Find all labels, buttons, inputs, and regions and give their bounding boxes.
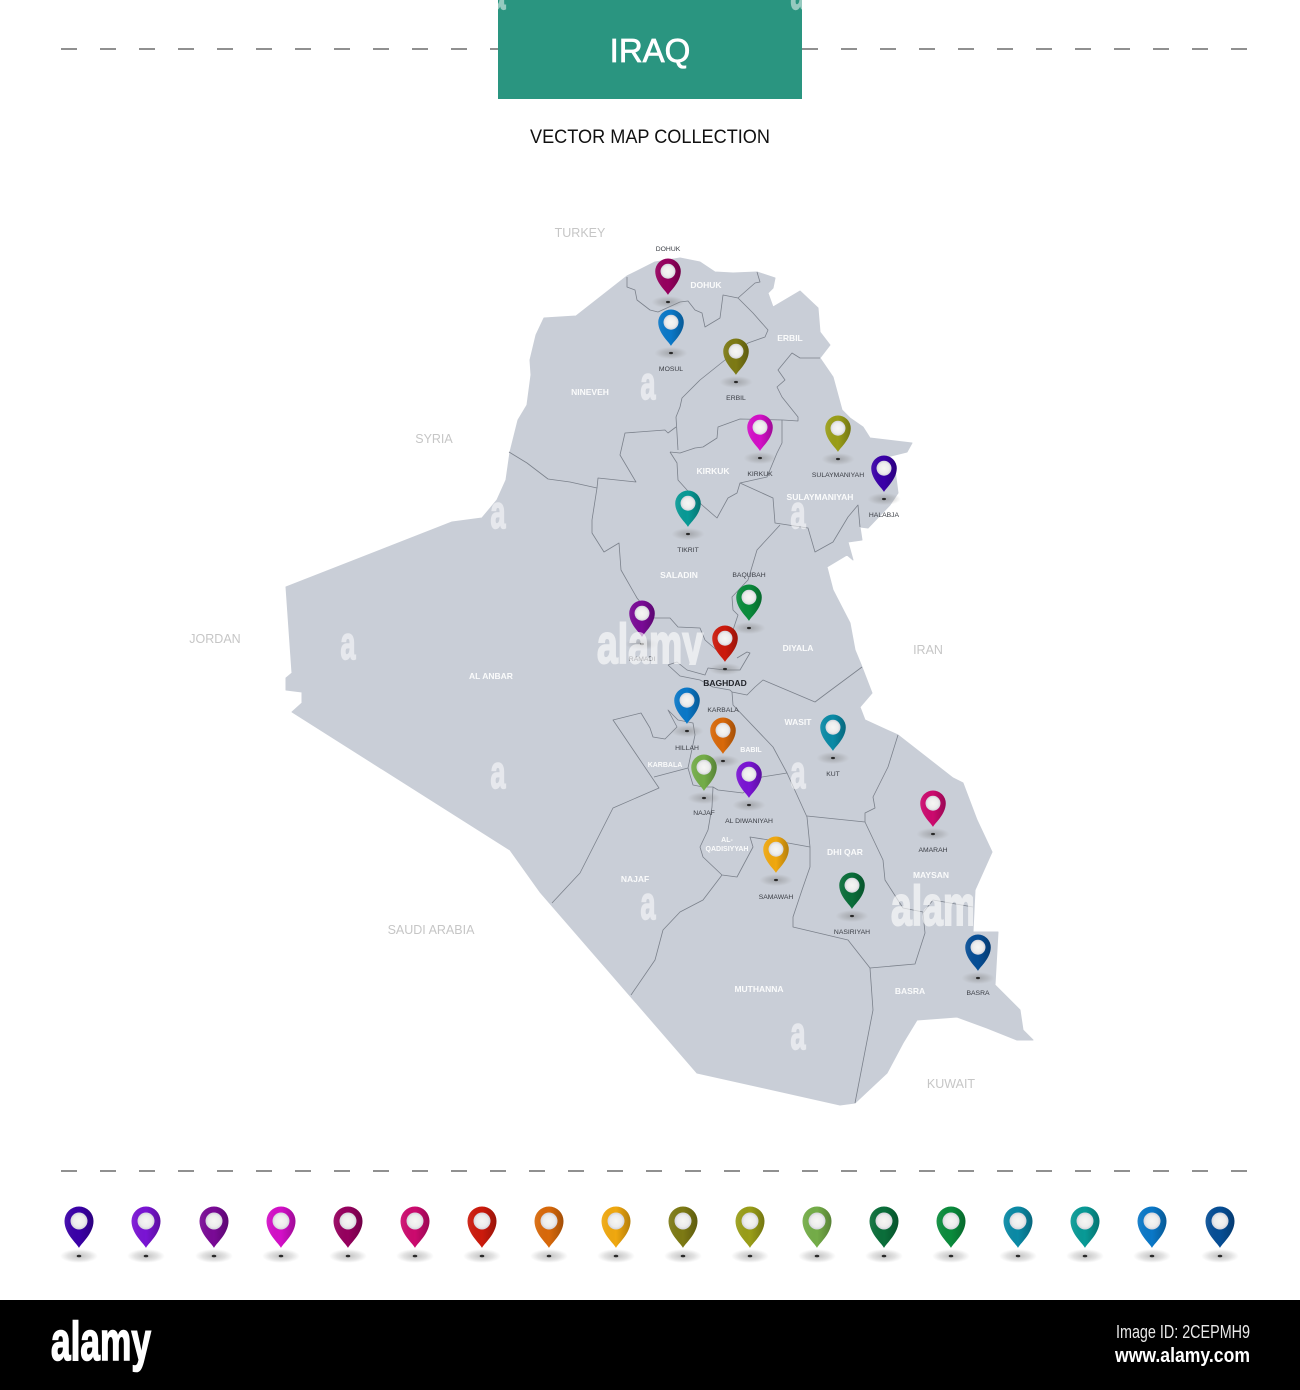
pin: Mosul: MOSUL — [659, 366, 683, 373]
pin: Ramadi: RAMADI — [629, 656, 655, 663]
country labels: SYRIA — [415, 432, 453, 446]
watermark: alamy — [891, 874, 997, 937]
pin: Baqubah — [732, 572, 766, 634]
pin: Nasiriyah — [834, 872, 870, 936]
region labels: KIRKUK — [696, 466, 730, 476]
map: Iraq landmass — [286, 258, 1033, 1105]
region labels: MUTHANNA — [734, 984, 784, 994]
pin: Najaf: NAJAF — [693, 810, 715, 817]
pin: Erbil — [719, 338, 753, 402]
country labels: KUWAIT — [927, 1077, 975, 1091]
watermark: a — [640, 877, 656, 929]
region labels: AL ANBAR — [469, 671, 513, 681]
title banner: IRAQ — [610, 32, 690, 69]
watermark: alamy — [597, 612, 703, 675]
footer bar: www.alamy.com — [1114, 1345, 1250, 1367]
region labels: KARBALA — [648, 762, 682, 769]
pin: Erbil: ERBIL — [726, 395, 746, 402]
region labels: NINEVEH — [571, 387, 609, 397]
region labels — [469, 280, 949, 996]
region labels: QADISIYYAH — [706, 846, 748, 853]
pin: Mosul — [654, 309, 688, 373]
pin: Dohuk — [651, 246, 685, 308]
country labels: SAUDI ARABIA — [388, 923, 475, 937]
pin: Kirkuk — [743, 414, 777, 478]
pin: Karbala: KARBALA — [707, 707, 739, 714]
pin: Nasiriyah: NASIRIYAH — [834, 929, 870, 936]
pin: Samawah — [759, 836, 793, 901]
region labels: SULAYMANIYAH — [787, 492, 853, 502]
pin: Sulaymaniyah: SULAYMANIYAH — [812, 472, 864, 479]
pin: Dohuk: DOHUK — [656, 246, 681, 253]
pin: Kut — [816, 714, 850, 778]
subtitle: VECTOR MAP COLLECTION — [530, 127, 770, 148]
region labels: DOHUK — [690, 280, 722, 290]
provincial borders — [509, 272, 973, 1103]
region labels: BABIL — [740, 747, 762, 754]
country labels: IRAN — [913, 643, 943, 657]
watermark — [340, 357, 997, 1059]
region labels: BASRA — [895, 986, 925, 996]
pin: Baghdad: BAGHDAD — [703, 678, 747, 688]
pin: Halabja: HALABJA — [869, 512, 900, 519]
footer bar: alamy — [51, 1310, 151, 1372]
pin: Halabja — [867, 455, 901, 519]
watermark: a — [490, 486, 506, 538]
pin: Basra: BASRA — [966, 990, 990, 997]
watermark: a — [490, 746, 506, 798]
pin: Sulaymaniyah — [812, 415, 864, 479]
pin: Kirkuk: KIRKUK — [747, 471, 773, 478]
pin: Ramadi — [625, 600, 659, 663]
region labels: NAJAF — [621, 874, 649, 884]
pin: Samawah: SAMAWAH — [759, 894, 793, 901]
bottom dashed rule — [61, 1170, 1248, 1172]
region labels: MAYSAN — [913, 870, 949, 880]
country labels: JORDAN — [189, 632, 241, 646]
pin: Tikrit: TIKRIT — [677, 547, 699, 554]
pin: Baghdad — [703, 625, 747, 688]
title banner — [490, 0, 806, 99]
watermark: a — [790, 746, 806, 798]
footer bar — [0, 1300, 1300, 1390]
pin colour legend — [60, 1206, 1239, 1263]
pin: Basra — [961, 934, 995, 997]
watermark: a — [790, 486, 806, 538]
footer bar: Image ID: 2CEPMH9 — [1116, 1322, 1250, 1342]
pin: Amarah: AMARAH — [918, 847, 948, 854]
watermark: a — [790, 1007, 806, 1059]
region labels: WASIT — [785, 717, 812, 727]
region labels: SALADIN — [660, 570, 698, 580]
top dashed rule — [61, 48, 1248, 50]
region labels: DHI QAR — [827, 847, 863, 857]
watermark: a — [340, 617, 356, 669]
region labels: ERBIL — [777, 333, 803, 343]
pin: Al Diwaniyah — [725, 761, 773, 825]
pin: Najaf — [687, 754, 721, 817]
pin: Karbala — [706, 707, 740, 767]
country labels: TURKEY — [555, 226, 606, 240]
pin: Al Diwaniyah: AL DIWANIYAH — [725, 818, 773, 825]
region labels: DIYALA — [783, 643, 813, 653]
region labels: AL- — [721, 837, 733, 844]
country labels — [189, 226, 975, 1091]
pin: Tikrit — [671, 490, 705, 554]
watermark: a — [640, 357, 656, 409]
pin: Hillah — [670, 687, 704, 752]
pin: Kut: KUT — [826, 771, 840, 778]
pin: Baqubah: BAQUBAH — [732, 572, 766, 579]
pin: Amarah — [916, 790, 950, 854]
pin: Hillah: HILLAH — [675, 745, 699, 752]
